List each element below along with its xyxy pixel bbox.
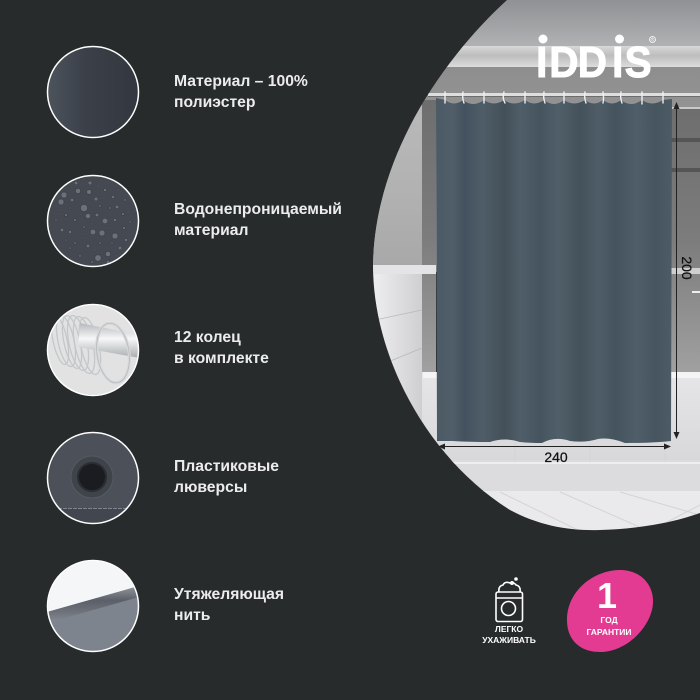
curtain bbox=[436, 98, 672, 443]
icon: water drops bbox=[48, 176, 138, 266]
text: material: полиэстер bbox=[174, 94, 255, 111]
tub ledge bbox=[423, 372, 700, 378]
feature: material bbox=[48, 46, 308, 138]
text: rings: 12 колец bbox=[174, 329, 241, 346]
easy care badge bbox=[482, 578, 536, 645]
left wall bbox=[373, 104, 422, 264]
icon: weighted hem bbox=[46, 560, 140, 652]
panel: bathroom photo bbox=[370, 0, 700, 536]
icon: fabric swatch bbox=[48, 46, 138, 138]
floor lines bbox=[500, 492, 700, 530]
feature: rings bbox=[48, 304, 269, 396]
text: grommets: Пластиковые bbox=[174, 458, 279, 475]
text: material: Материал – 100% bbox=[174, 73, 308, 90]
text: weight thread: нить bbox=[174, 607, 210, 624]
warranty text: ГАРАНТИИ bbox=[586, 627, 632, 637]
text: weight thread: Утяжеляющая bbox=[174, 586, 284, 603]
ceiling bbox=[462, 0, 700, 47]
back wall bbox=[370, 67, 700, 272]
feature: weight thread bbox=[40, 560, 284, 660]
logo: IDDIS: IDDIS bbox=[536, 37, 652, 86]
text: rings: в комплекте bbox=[174, 350, 269, 367]
width arrow bbox=[439, 446, 670, 448]
text: grommets: люверсы bbox=[174, 479, 247, 496]
curtain rings bbox=[445, 92, 663, 104]
dimension: height: 200 bbox=[679, 256, 695, 280]
tub front bbox=[422, 372, 700, 462]
floor bbox=[484, 491, 700, 530]
wall niche bbox=[422, 100, 436, 372]
pink blob bbox=[567, 570, 653, 652]
dimension: width: 240 bbox=[544, 449, 568, 465]
warranty number: 1 bbox=[597, 575, 617, 616]
icon: rings on rod bbox=[48, 304, 140, 396]
icon: grommet bbox=[48, 432, 138, 524]
warranty text: ГОД bbox=[600, 615, 618, 625]
text: easy care: УХАЖИВАТЬ bbox=[482, 635, 536, 645]
logo: IDDIS: ® bbox=[651, 36, 655, 44]
right shelves bbox=[671, 107, 700, 372]
feature: waterproof bbox=[48, 176, 342, 266]
text: easy care: ЛЕГКО bbox=[495, 624, 524, 634]
cornice bbox=[446, 46, 700, 67]
skirting bbox=[451, 460, 700, 492]
warranty badge bbox=[567, 570, 653, 652]
text: waterproof: Водонепроницаемый bbox=[174, 201, 342, 218]
tile seams bbox=[375, 310, 422, 362]
shower rod bbox=[428, 93, 700, 97]
tile band bbox=[373, 265, 436, 274]
height arrow bbox=[676, 103, 678, 438]
icon: washing machine bbox=[496, 578, 522, 622]
text: waterproof: материал bbox=[174, 222, 248, 239]
feature: grommets bbox=[48, 432, 279, 524]
tile wall left bbox=[373, 274, 422, 422]
